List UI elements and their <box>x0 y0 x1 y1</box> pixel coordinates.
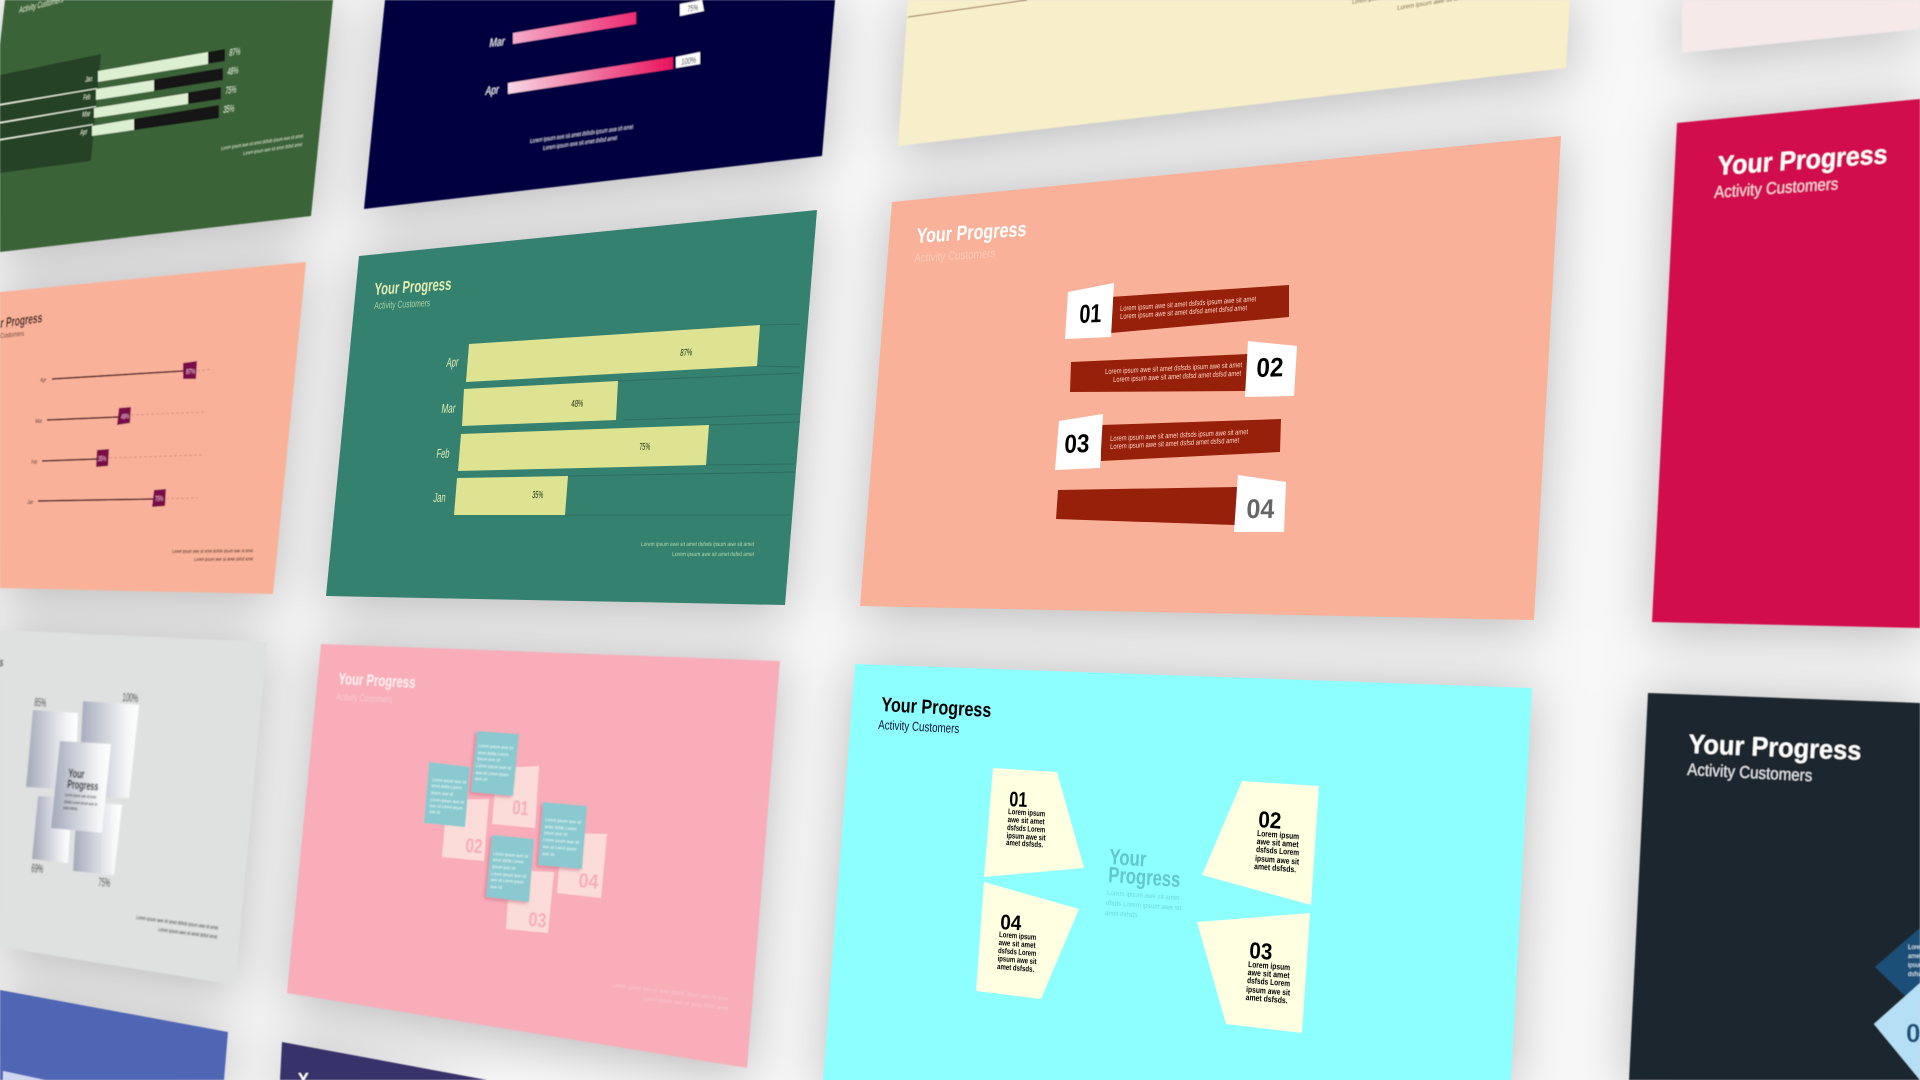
centre card: amet dsfsds. <box>63 805 78 811</box>
month labels <box>484 34 506 98</box>
teal card 2 <box>424 762 470 827</box>
card 75% <box>73 801 122 875</box>
centre card <box>51 741 111 833</box>
teal card 1 <box>469 731 519 798</box>
row: March: Mar <box>35 419 42 425</box>
bar: February 75% <box>458 425 709 471</box>
card 04: ipsum awe sit <box>997 954 1037 966</box>
month labels: Apr <box>484 83 500 98</box>
item 04: 04 <box>1246 494 1275 524</box>
panel: green stacked bars slide <box>0 0 333 252</box>
row: February <box>31 449 202 467</box>
card values: 75% <box>98 875 111 890</box>
caption: Lorem ipsum awe sit amet dsfsds ipsum awe sit amet <box>136 915 219 932</box>
back card 02 <box>442 799 489 861</box>
back card 03: 03 <box>528 909 547 932</box>
panel: grey card stack slide <box>0 630 267 985</box>
row: February: Feb <box>31 460 38 466</box>
centre text block: Progress <box>1108 862 1181 892</box>
row: March: 48% <box>121 414 129 421</box>
item 02: Lorem ipsum awe sit amet dsfsds ipsum awe sit amet <box>1105 360 1243 376</box>
month labels: Apr <box>446 354 460 370</box>
item 01: Lorem ipsum awe sit amet dsfsds ipsum awe sit amet <box>1120 294 1257 313</box>
card 01: awe sit amet <box>1007 815 1045 826</box>
teal card 3: Lorem ipsum awe sit <box>493 851 529 859</box>
title: Your Progress <box>374 275 452 299</box>
bar: January 35% <box>454 476 568 515</box>
card values: 85% <box>34 695 47 710</box>
caption: Lorem ipsum awe sit amet dsfsds ipsum awe sit amet <box>613 983 729 1003</box>
subtitle: Activity Customers <box>878 717 960 736</box>
card 02: awe sit amet <box>1256 836 1299 849</box>
month labels: Mar <box>488 34 506 50</box>
value tag 100%: 100% <box>681 55 697 67</box>
teal card 1: Lorem ipsum awe sit <box>476 763 512 770</box>
row: January: 75% <box>155 496 163 503</box>
teal card 2: ipsum awe sit <box>431 790 454 797</box>
card values: 69% <box>31 861 44 876</box>
title: Your Progress <box>1688 729 1862 766</box>
month labels: Mar <box>441 400 457 416</box>
teal card 1: ipsum awe sit <box>477 756 501 763</box>
caption <box>613 983 729 1012</box>
teal card 3: amet dsfds Lorem <box>492 857 524 864</box>
row: April <box>40 361 212 384</box>
light diamond with number <box>1874 983 1920 1080</box>
item 02: 02 <box>1256 352 1284 383</box>
month labels <box>433 354 460 505</box>
card 100% <box>78 701 139 798</box>
row: April: 87% <box>186 368 195 376</box>
card 03: amet dsfsds. <box>1245 992 1288 1005</box>
centre card: Your <box>68 766 85 781</box>
bar: April 87% <box>466 325 760 382</box>
subtitle: Customers <box>0 331 25 340</box>
month labels: Jan <box>433 490 447 505</box>
value tag 75% <box>680 0 704 16</box>
caption: Lorem ipsum awe sit amet dsfsds ipsum awe sit amet <box>172 548 254 555</box>
grid lines <box>565 324 800 515</box>
panel: cream slide <box>898 0 1570 146</box>
caption <box>172 548 254 563</box>
percent values: 75% <box>225 84 237 97</box>
teal card 4: amet dsfds Lorem <box>544 824 577 832</box>
teal card 3 <box>484 835 534 904</box>
row: January <box>27 489 198 507</box>
caption: Lorem ipsum awe sit amet dsfsd amet <box>643 996 729 1012</box>
subtitle: Activity Customers <box>374 298 431 312</box>
row: March <box>35 407 207 425</box>
card 01 <box>984 768 1084 877</box>
bar: March 48% <box>462 381 618 426</box>
percent values <box>223 46 241 116</box>
centre card: dsfsds Lorem ipsum awe sit <box>64 799 98 807</box>
bar: March <box>513 12 636 44</box>
item 02: Lorem ipsum awe sit amet dsfsd amet dsfsd amet <box>1113 369 1242 384</box>
caption: Lorem ipsum awe sit amet dsfsds ipsum awe sit amet <box>221 133 304 152</box>
subtitle: Activity Customers <box>914 246 996 265</box>
teal card 4: awe sit Lorem ipsum <box>542 844 577 852</box>
percent values: 87% <box>229 46 241 59</box>
back card 01: 01 <box>512 797 529 820</box>
value tag 75%: 75% <box>687 2 699 14</box>
panel: salmon lollipop slide <box>0 262 306 594</box>
teal card 2: awe sit Lorem ipsum <box>429 803 463 811</box>
panel: cyan four-card slide <box>823 664 1532 1080</box>
item 04 <box>1056 475 1286 532</box>
teal card 4: Lorem ipsum awe sit <box>545 817 582 825</box>
card 02: ipsum awe sit <box>1255 853 1300 867</box>
title: Your Progress <box>1717 139 1888 181</box>
teal card 1: awe sit Lorem ipsum <box>475 770 509 777</box>
bar: April 87%: 87% <box>680 347 693 359</box>
caption: Lorem ipsum awe sit amet dsfsd amet <box>672 552 755 558</box>
card 03 <box>1197 913 1310 1033</box>
caption: Lorem ipsum awe sit amet dsfsd amet <box>543 136 618 152</box>
card 69% <box>32 796 72 863</box>
card values: 100% <box>122 690 139 705</box>
teal card 3: awe sit <box>490 884 503 890</box>
teal card 2: Lorem ipsum awe sit <box>430 797 465 805</box>
teal card 1: amet dsfds Lorem <box>477 750 509 757</box>
teal card 2: amet dsfds Lorem <box>431 783 462 790</box>
panel: navy gradient bars slide <box>364 0 835 209</box>
card 01: ipsum awe sit <box>1006 831 1046 843</box>
teal card 2: Lorem ipsum awe sit <box>432 777 467 785</box>
card 03: awe sit amet <box>1247 967 1290 980</box>
subtitle: Activity Customers <box>1714 174 1839 202</box>
card 04: dsfsds Lorem <box>998 946 1036 958</box>
panel: teal bars slide <box>326 210 817 605</box>
card 02: amet dsfsds. <box>1254 861 1296 874</box>
title: Your Progress <box>916 218 1027 248</box>
panel: pink numbered cards slide <box>287 644 780 1068</box>
card 02: 02 <box>1258 806 1282 834</box>
card 04 <box>976 882 1079 999</box>
month labels: Jan <box>85 74 93 84</box>
card 01: amet dsfsds. <box>1006 838 1043 849</box>
panel: blue slide <box>0 990 228 1080</box>
percent values: 48% <box>227 65 239 78</box>
inner card corner <box>3 1071 45 1080</box>
card 03: dsfsds Lorem <box>1247 975 1291 988</box>
blue diamond with text <box>1875 928 1920 1010</box>
row: April: Apr <box>40 378 46 384</box>
rule line <box>908 0 1027 17</box>
caption <box>136 915 219 941</box>
title: Your Progress <box>338 670 416 692</box>
teal card 1: awe sit <box>475 776 488 782</box>
panel: crimson slide <box>1652 99 1920 628</box>
centre text block: Your <box>1109 844 1147 872</box>
item 03 <box>1055 414 1281 470</box>
bar chart: monthly tracks <box>92 49 225 136</box>
caption <box>530 125 634 152</box>
item 03: Lorem ipsum awe sit amet dsfsd amet dsfsd amet <box>1110 436 1240 451</box>
teal card 2: awe sit <box>429 809 441 815</box>
card 01: 01 <box>1009 788 1028 812</box>
caption <box>641 542 755 558</box>
panel: pale pink slide <box>1682 0 1920 53</box>
card 02: dsfsds Lorem <box>1256 844 1300 857</box>
bar: April <box>508 57 673 94</box>
back card 03 <box>506 870 554 933</box>
item 01: 01 <box>1079 298 1102 329</box>
card 03: 03 <box>1249 937 1273 965</box>
teal card 4: Lorem ipsum awe sit <box>543 837 580 845</box>
card 01: dsfsds Lorem <box>1007 823 1045 834</box>
back card 01 <box>492 766 539 828</box>
subtitle: Activity Customers <box>336 692 393 706</box>
value tag 100% <box>676 52 700 68</box>
centre text block <box>1105 844 1181 919</box>
item 03: 03 <box>1064 428 1090 459</box>
caption: Lorem ipsum awe sit amet dsfsd amet <box>194 556 254 563</box>
card 04: 04 <box>1000 911 1022 935</box>
dark month label block <box>0 54 101 173</box>
month labels: Mar <box>82 109 91 119</box>
centre text block: amet dsfsds. <box>1105 910 1139 919</box>
caption: Lorem ipsum awe sit amet dsfsd amet <box>243 142 303 157</box>
teal card 4: awe sit <box>542 851 555 857</box>
card 03: ipsum awe sit <box>1246 984 1291 998</box>
month labels: Feb <box>436 446 451 461</box>
percent values: 35% <box>223 103 235 116</box>
bar: January 35%: 35% <box>532 490 544 501</box>
month labels: Apr <box>80 127 88 137</box>
card values <box>31 690 139 890</box>
centre text block: Lorem ipsum awe sit amet <box>1107 890 1179 902</box>
teal card 3: ipsum awe sit <box>492 864 516 871</box>
caption: Lorem ipsum awe sit amet dsfsds ipsum awe sit amet <box>641 542 755 548</box>
item 01 <box>1065 283 1289 339</box>
back card 04: 04 <box>578 870 600 894</box>
teal card 4: ipsum awe sit <box>544 830 568 837</box>
item 02 <box>1070 341 1297 397</box>
card 03: Lorem ipsum <box>1248 959 1291 972</box>
title: Your Progress <box>881 694 992 722</box>
item 01: Lorem ipsum awe sit amet dsfsd amet dsfsd amet <box>1120 303 1248 321</box>
item 03: Lorem ipsum awe sit amet dsfsds ipsum awe sit amet <box>1110 427 1249 443</box>
panel: large salmon numbered list slide <box>860 136 1561 620</box>
card 04: amet dsfsds. <box>997 962 1034 974</box>
row: January: Jan <box>27 500 33 506</box>
month labels: Feb <box>83 92 91 102</box>
card 01: Lorem ipsum <box>1008 807 1045 818</box>
row: February: 35% <box>98 456 106 463</box>
centre card: Lorem ipsum awe sit amet <box>65 792 97 800</box>
subtitle: Activity Customers <box>1687 760 1813 785</box>
panel: dark slide <box>1629 693 1920 1080</box>
card 04: Lorem ipsum <box>999 930 1036 942</box>
centre text block: dfsds Lorem ipsum awe sit <box>1106 900 1181 912</box>
card 85% <box>26 710 78 790</box>
caption: Lorem ipsum awe sit amet dsfsds ipsum awe sit amet <box>530 125 634 145</box>
month labels <box>80 74 93 137</box>
caption <box>1352 0 1468 12</box>
back card 02: 02 <box>465 835 483 858</box>
back card 04 <box>557 833 607 898</box>
panel: purple slide <box>280 1042 487 1080</box>
bar: February 75%: 75% <box>639 442 651 453</box>
teal card 4 <box>536 802 587 871</box>
teal card 3: awe sit Lorem ipsum <box>490 877 524 885</box>
teal card 1: Lorem ipsum awe sit <box>478 743 514 750</box>
card 04: awe sit amet <box>998 938 1036 950</box>
card 02 <box>1202 781 1319 905</box>
teal card 3: Lorem ipsum awe sit <box>491 871 527 879</box>
caption: Lorem ipsum awe sit amet dsfsd amet <box>158 927 218 941</box>
caption <box>221 133 304 157</box>
title: r Progress <box>0 309 43 331</box>
card 02: Lorem ipsum <box>1257 828 1300 841</box>
centre card: Progress <box>67 777 99 793</box>
bar: March 48%: 48% <box>571 399 584 410</box>
